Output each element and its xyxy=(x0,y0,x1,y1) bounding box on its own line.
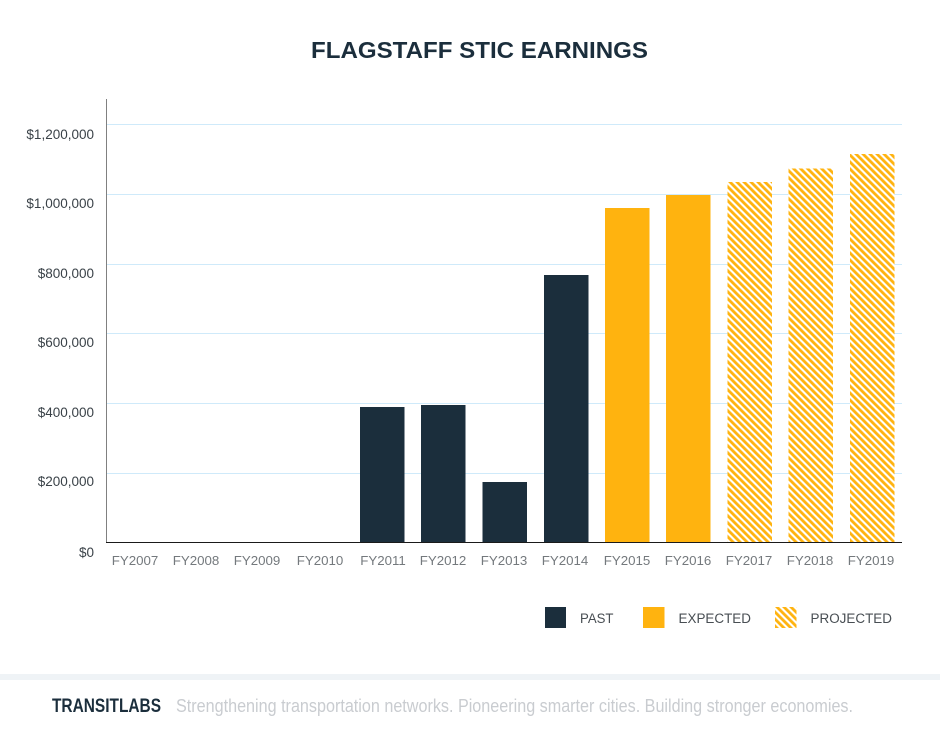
x-axis labels: FY2016 xyxy=(665,553,711,568)
x-axis labels: FY2007 xyxy=(112,553,158,568)
legend: projected: PROJECTED xyxy=(810,611,892,626)
y-axis labels xyxy=(26,127,94,560)
x-axis line xyxy=(106,542,902,544)
y-axis gridlines xyxy=(107,124,902,474)
x-axis labels: FY2012 xyxy=(420,553,466,568)
projected bars xyxy=(728,154,894,542)
x-axis labels: FY2009 xyxy=(234,553,280,568)
x-axis labels: FY2018 xyxy=(787,553,833,568)
x-axis labels: FY2013 xyxy=(481,553,527,568)
y-axis labels: $800,000 xyxy=(38,266,94,281)
legend: past xyxy=(545,607,614,628)
legend: expected xyxy=(643,607,751,628)
x-axis labels: FY2008 xyxy=(173,553,219,568)
y-axis labels: $1,000,000 xyxy=(26,196,94,211)
legend: projected xyxy=(775,607,892,628)
y-axis labels: $0 xyxy=(79,545,94,560)
x-axis labels: FY2017 xyxy=(726,553,772,568)
footer band xyxy=(0,674,940,680)
y-axis labels: $600,000 xyxy=(38,335,94,350)
x-axis labels: FY2014 xyxy=(542,553,588,568)
x-axis labels: FY2011 xyxy=(360,553,406,568)
legend xyxy=(545,607,892,628)
x-axis labels: FY2010 xyxy=(297,553,343,568)
x-axis labels: FY2019 xyxy=(848,553,894,568)
past bars xyxy=(360,275,588,542)
y-axis labels: $400,000 xyxy=(38,405,94,420)
y-axis labels: $1,200,000 xyxy=(26,127,94,142)
x-axis labels xyxy=(112,553,894,568)
y-axis labels: $200,000 xyxy=(38,474,94,489)
footer tagline: Strengthening transportation networks. Pioneering smarter cities. Building stronger economies. xyxy=(176,696,853,716)
legend: expected: EXPECTED xyxy=(678,611,751,626)
legend: past: PAST xyxy=(580,611,614,626)
title: FLAGSTAFF STIC EARNINGS xyxy=(311,37,648,63)
footer logo: TRANSITLABS xyxy=(52,695,161,717)
bar chart: earnings by fiscal year xyxy=(26,99,902,568)
expected bars xyxy=(605,195,710,542)
x-axis labels: FY2015 xyxy=(604,553,650,568)
y-axis line xyxy=(106,99,108,543)
